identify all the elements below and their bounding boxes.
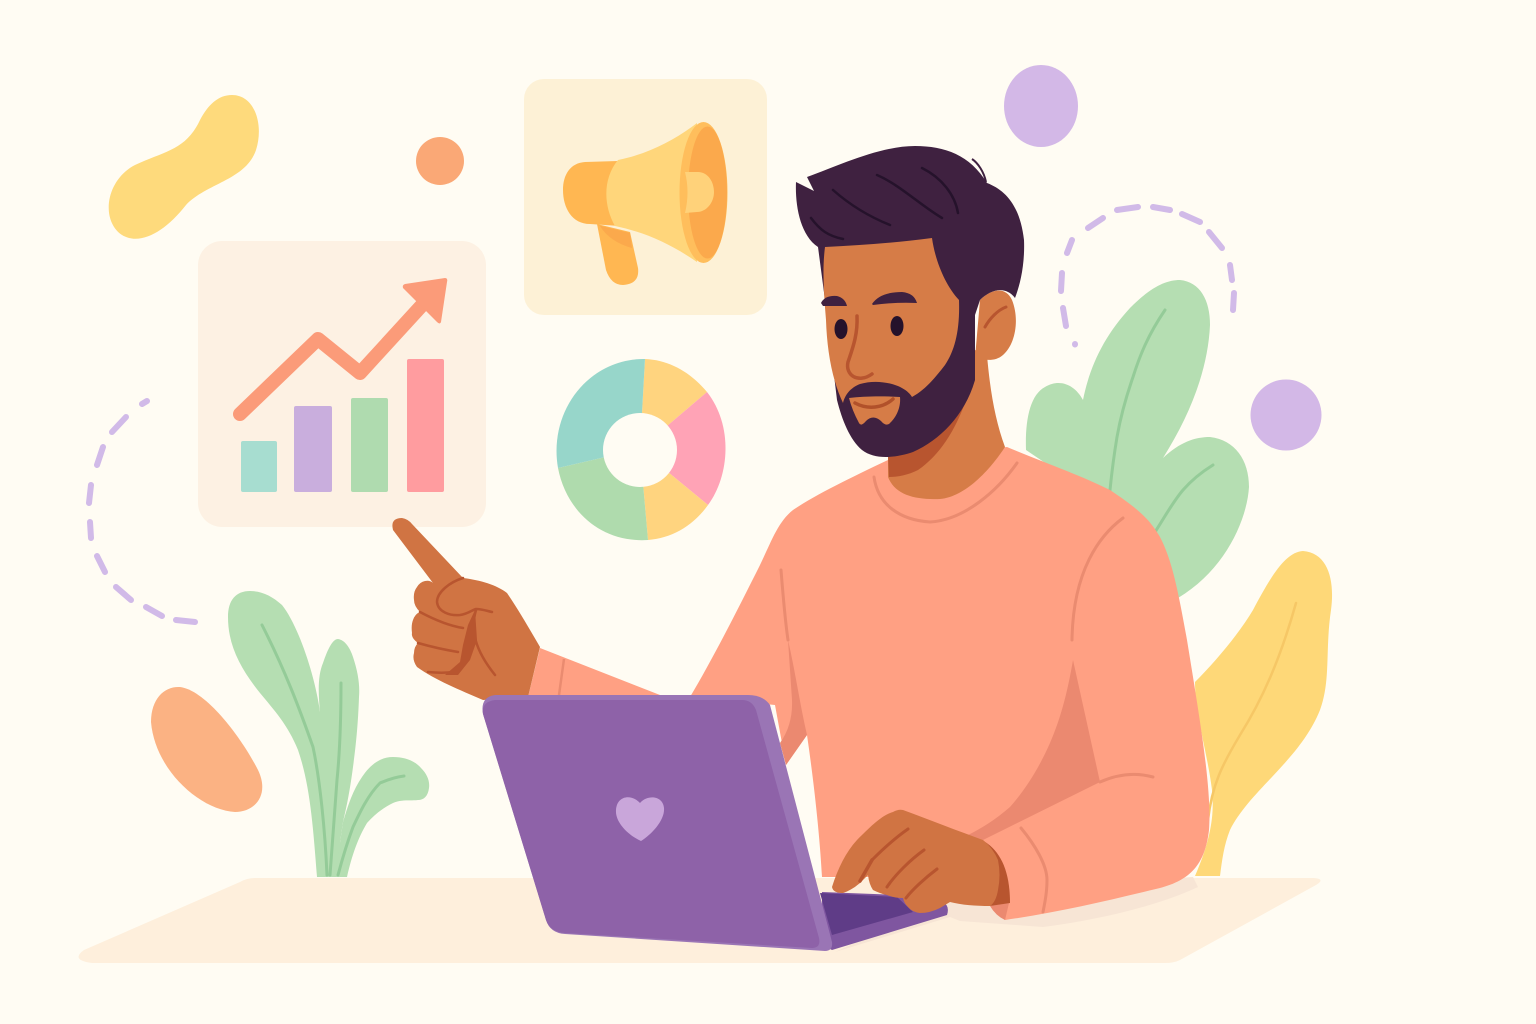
neck shadow (888, 403, 965, 477)
decorative purple circle right (1250, 380, 1322, 450)
eyebrows (821, 292, 917, 306)
sleeve shading (968, 660, 1100, 840)
laptop lid edge (482, 695, 832, 951)
dashed arc right (1061, 207, 1234, 344)
wrist shadow (982, 840, 1010, 906)
leaf veins (262, 625, 404, 875)
inner cuff shadow (990, 903, 1009, 920)
keyboard base (822, 892, 948, 950)
panel: megaphone card (524, 79, 767, 315)
thumb shadow (445, 610, 477, 675)
plant: background yellow leaf (1195, 551, 1332, 876)
desk shadow (835, 877, 1198, 952)
decorative purple circle top (1004, 65, 1078, 147)
ear (975, 291, 1016, 360)
decorative yellow blob (109, 95, 259, 239)
eyes (834, 316, 904, 339)
hand (832, 810, 1000, 913)
stray hair (972, 159, 986, 182)
hand pointing (392, 518, 540, 700)
donut chart (557, 359, 726, 540)
face (823, 238, 959, 403)
plant: foreground left (228, 591, 429, 877)
finger creases (418, 578, 495, 675)
sweater seams (781, 463, 1153, 912)
dashed arc left (89, 401, 195, 622)
person (690, 146, 1209, 920)
laptop (482, 695, 948, 951)
pointing arm (392, 518, 660, 700)
laptop lid (483, 700, 819, 948)
trend arrow (240, 278, 447, 414)
sweater body and arms (690, 447, 1209, 920)
mouth area (849, 396, 900, 425)
bar chart (241, 359, 444, 492)
icon: megaphone (563, 122, 728, 285)
hair and beard (796, 146, 1024, 457)
typing hand (832, 810, 1010, 920)
leaf: right (335, 757, 429, 877)
knuckle lines (860, 829, 937, 898)
decorative orange oval (151, 687, 262, 812)
hair strands (811, 168, 958, 239)
leaf: middle (319, 639, 359, 877)
icon: heart logo (616, 797, 664, 841)
desk (79, 878, 1321, 963)
leaf: tall left (228, 591, 345, 877)
neck (888, 350, 1005, 499)
arm fold shading (780, 640, 807, 765)
decorative orange dot (416, 137, 464, 185)
plant: background green leaves (1026, 280, 1249, 598)
nose (848, 316, 872, 378)
cuff (528, 648, 660, 697)
panel: growth chart card (198, 241, 486, 527)
